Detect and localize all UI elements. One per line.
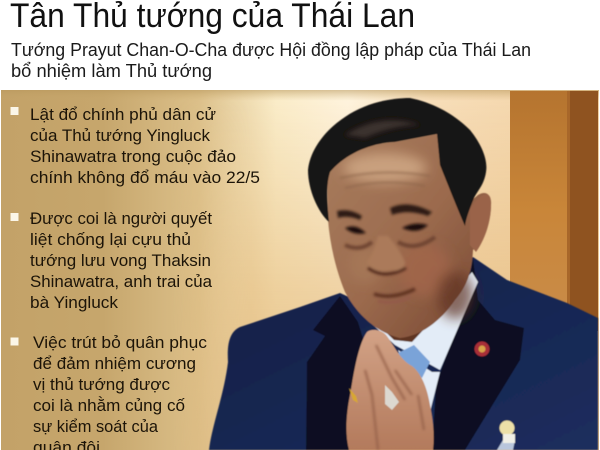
shirt collar [360, 272, 478, 412]
neck [368, 262, 462, 342]
bullet 2: tướng lưu vong Thaksin [30, 252, 211, 270]
badge [497, 420, 515, 450]
hair sheen [345, 120, 420, 138]
hair [308, 98, 486, 226]
eyebrows and eyes [337, 172, 435, 302]
bullet 1: của Thủ tướng Yingluck [30, 127, 211, 145]
lapel pin [474, 342, 490, 356]
panel: photo background [1, 90, 599, 450]
clasped hands [346, 330, 434, 450]
bullet 1 [10, 106, 260, 187]
bullet 2: Được coi là người quyết [30, 210, 212, 228]
finger lines [365, 345, 424, 450]
tie [396, 345, 430, 378]
bullet 2: Shinawatra, anh trai của [30, 273, 213, 291]
bullet list [10, 106, 260, 450]
bullet 3: sự kiểm soát của [33, 418, 159, 436]
bullet 2: liệt chống lại cựu thủ [30, 231, 191, 249]
ring right [385, 385, 399, 410]
subtitle: bổ nhiệm làm Thủ tướng [11, 61, 212, 81]
suit jacket [209, 257, 598, 450]
bullet 3: để đảm nhiệm cương [33, 355, 196, 373]
bullet 3 [10, 334, 207, 450]
bullet 3: vị thủ tướng được [33, 376, 170, 394]
subtitle: Tướng Prayut Chan-O-Cha được Hội đồng lập pháp của Thái Lan [11, 40, 531, 60]
bullet 3: Việc trút bỏ quân phục [33, 334, 207, 352]
photo: man in navy suit [209, 98, 598, 450]
ear [470, 194, 491, 252]
ring left [349, 388, 358, 403]
subtitle [11, 40, 531, 81]
bullet 2 [10, 210, 213, 312]
bullet 2: bà Yingluck [30, 294, 119, 312]
bullet 1: chính không đổ máu vào 22/5 [30, 169, 260, 187]
face [327, 134, 491, 338]
dark lapel shadow [306, 258, 524, 450]
bullet 1: Shinawatra trong cuộc đảo [30, 148, 236, 166]
bullet 3: coi là nhằm củng cố [33, 396, 185, 415]
face highlights [343, 153, 473, 319]
bullet 1: Lật đổ chính phủ dân cử [30, 106, 216, 124]
